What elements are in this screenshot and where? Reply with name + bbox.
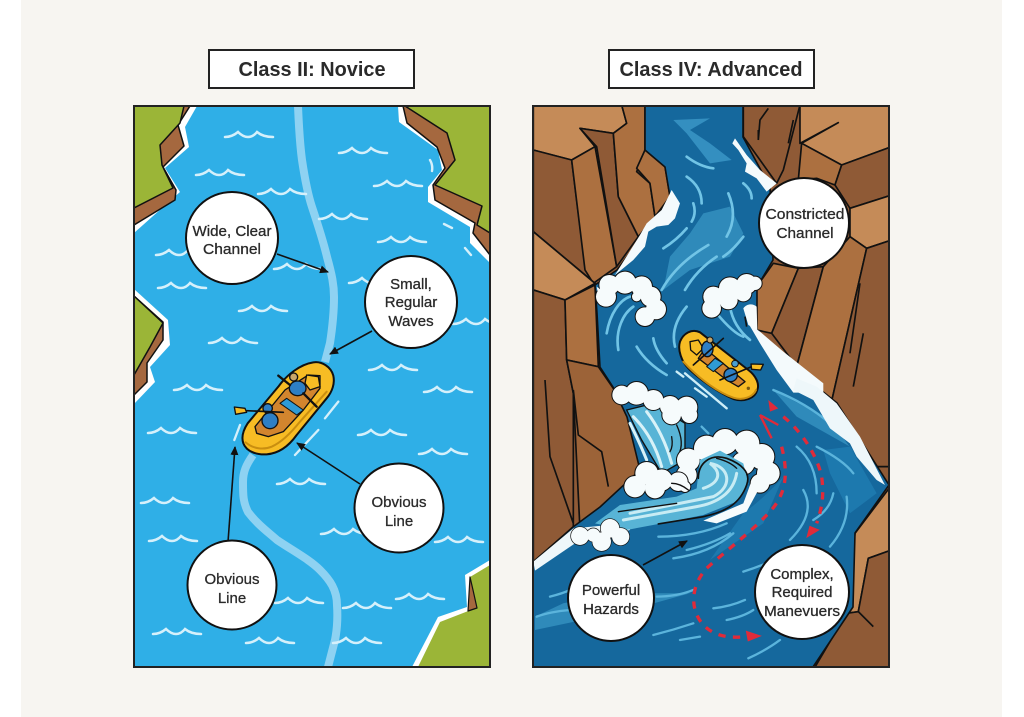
waterfall drop <box>612 382 697 473</box>
water swirl shading <box>535 118 877 630</box>
callout: powerful hazards: Powerful <box>582 582 640 599</box>
river line lower <box>243 455 337 667</box>
callout: obvious line left <box>188 540 276 630</box>
panel: Class IV gorge <box>533 105 892 670</box>
callout: powerful hazards: Hazards <box>583 601 639 618</box>
bank: middle left <box>134 289 170 404</box>
callout: complex required maneuvers <box>755 545 849 639</box>
callout: obvious line right <box>354 464 444 552</box>
small regular waves <box>141 132 501 643</box>
callout: wide clear channel: Wide, Clear <box>192 223 272 240</box>
breaking wave curl <box>571 429 780 551</box>
red dashed maneuver route right <box>768 400 823 537</box>
canyon rock lines and right lower faces <box>545 380 892 670</box>
callout: wide clear channel <box>186 192 278 284</box>
callout: complex required maneuvers: Complex, <box>770 566 834 583</box>
foam cloud left <box>596 272 666 326</box>
title: Class II Novice <box>209 50 414 88</box>
callout: obvious line right: Line <box>385 513 413 530</box>
callout: small regular waves: Waves <box>388 313 434 330</box>
white foam along banks lower <box>533 378 885 571</box>
panel: Class II river <box>134 106 501 667</box>
river water <box>533 106 889 667</box>
arrow: to regular waves <box>330 331 372 354</box>
callout: small regular waves <box>365 256 457 348</box>
title: Class IV Advanced: Class IV: Advanced <box>620 59 802 81</box>
callout: small regular waves: Regular <box>385 294 437 311</box>
callout: constricted channel: Constricted <box>766 206 844 223</box>
panel frame <box>134 106 490 667</box>
arrow: from obvious line left <box>228 447 235 542</box>
bank: top right <box>398 106 490 263</box>
raft with two paddlers <box>677 331 763 408</box>
arrow: to powerful hazard <box>643 541 687 565</box>
water streaks lower <box>537 390 853 658</box>
foam cloud right <box>702 274 762 330</box>
callout: powerful hazards <box>568 555 654 641</box>
water streaks upper <box>607 157 752 375</box>
white foam along banks upper <box>615 138 823 393</box>
callout: obvious line left: Obvious <box>204 571 260 588</box>
arrow: to clear channel <box>277 254 328 272</box>
raft with two paddlers <box>234 362 338 455</box>
callout: obvious line right: Obvious <box>371 494 427 511</box>
arrow: from obvious line right <box>297 443 360 484</box>
river line upper <box>298 106 334 362</box>
bank: bottom right <box>412 560 490 667</box>
red dashed maneuver route left <box>694 415 785 641</box>
bank: top left <box>134 106 197 233</box>
callout: complex required maneuvers: Manevuers <box>764 603 840 620</box>
callout: wide clear channel: Channel <box>203 241 261 258</box>
callout: constricted channel: Channel <box>776 225 834 242</box>
canyon rock faces upper <box>533 105 892 567</box>
title: Class IV Advanced <box>609 50 814 88</box>
callout: small regular waves: Small, <box>390 276 432 293</box>
callout: obvious line left: Line <box>218 590 246 607</box>
callout: constricted channel <box>759 178 849 268</box>
callout: complex required maneuvers: Required <box>772 584 832 601</box>
panel frame <box>533 106 889 667</box>
title: Class II Novice: Class II: Novice <box>238 59 386 81</box>
